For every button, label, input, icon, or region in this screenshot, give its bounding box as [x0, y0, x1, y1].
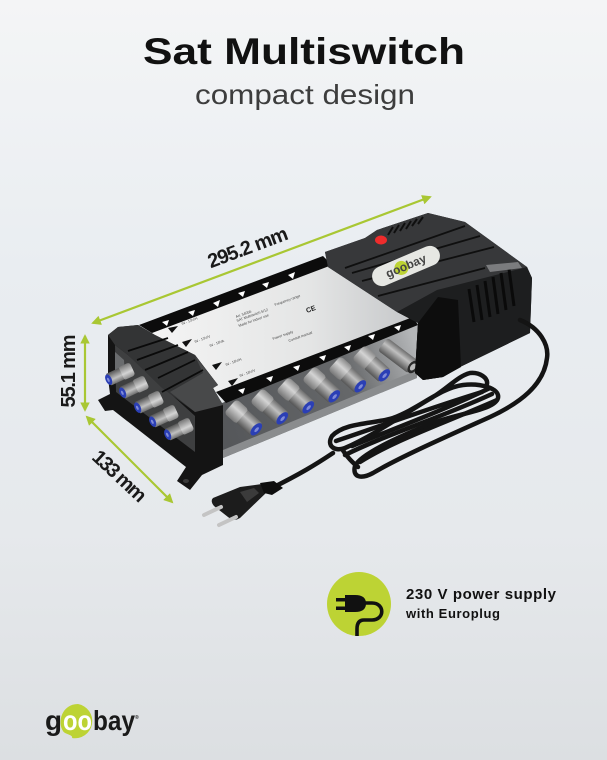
logo plate: [369, 243, 443, 289]
left connectors: [103, 362, 194, 442]
label text: CE: [305, 305, 317, 315]
callout: power supply: [327, 572, 557, 636]
front connectors: [224, 345, 394, 439]
icon: plug in circle: [327, 572, 391, 636]
left housing: [98, 325, 223, 490]
dimension: width arrow: 295.2 mm: [205, 223, 291, 273]
connector bay: [115, 345, 195, 452]
label text: Made for indoor use: [238, 313, 269, 328]
brand logo: oo: [63, 705, 92, 736]
brand logo: [45, 704, 139, 738]
label text: IN - 18V/V: [239, 368, 256, 378]
dimension: depth arrow: 133 mm: [87, 446, 151, 507]
power cable and plug: [204, 320, 547, 525]
label text: IN - 13V/H: [181, 316, 198, 326]
label text: Art. 54056: [235, 310, 252, 319]
vent slots: [469, 269, 514, 322]
subtitle: compact design: [195, 79, 415, 110]
product: multiswitch: [98, 213, 532, 490]
dimension: height arrow: 55.1 mm: [58, 334, 80, 408]
label text: Consult manual: [288, 331, 313, 343]
cable coil: [272, 320, 547, 488]
brand logo: bay: [93, 705, 135, 736]
label text: Frequency range: [274, 294, 301, 307]
top label face: [150, 262, 418, 392]
label text: IN - 18VA: [209, 339, 225, 348]
label text: SAT Multiswitch 5/12: [236, 308, 269, 323]
callout text: 230 V power supply: [406, 586, 557, 603]
plug: [204, 481, 283, 525]
right housing: power supply: [325, 213, 532, 380]
power connector: [378, 338, 421, 376]
title: Sat Multiswitch: [143, 31, 465, 72]
brand logo: ®: [135, 714, 139, 721]
black front strip: [216, 317, 418, 403]
bay window: [115, 352, 125, 378]
label text: [181, 294, 317, 378]
logo plate: goobay: [384, 251, 429, 281]
housing silhouette: [98, 325, 223, 490]
mounting foot: [183, 479, 189, 483]
brand logo: g: [45, 705, 62, 736]
cable to plug: [272, 453, 333, 488]
red LED: [375, 236, 387, 244]
label text: Power supply: [272, 330, 294, 341]
black rear strip: [139, 256, 332, 333]
label text: IN - 13V/V: [194, 334, 211, 344]
top cap: [108, 325, 223, 412]
dimension: width arrow: [93, 197, 430, 323]
silver front side: [222, 323, 418, 458]
label arrows: [168, 326, 238, 386]
label text: IN - 18V/H: [225, 357, 242, 367]
dimension: depth arrow: [87, 417, 172, 507]
callout: power supply: with Europlug: [405, 606, 500, 621]
